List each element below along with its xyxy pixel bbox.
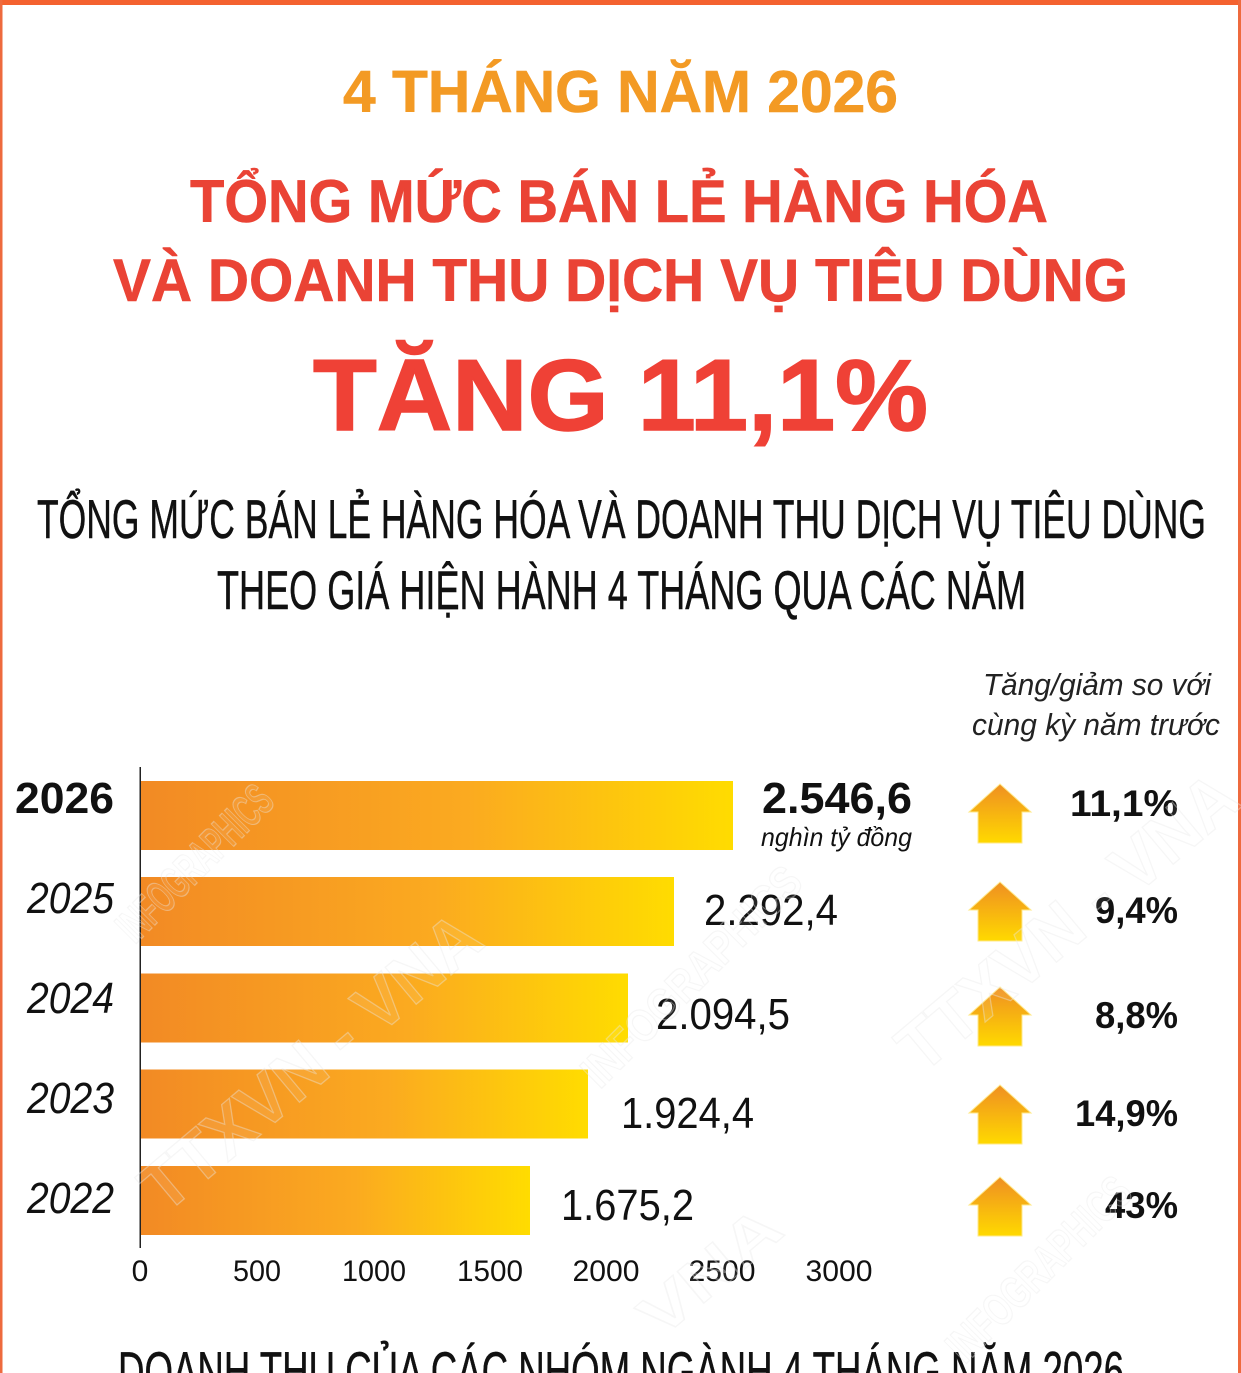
watermarks: VNA <box>625 1193 795 1350</box>
value labels: 2.292,4 <box>704 886 838 935</box>
column header: change vs same period: Tăng/giảm so với <box>983 667 1212 702</box>
watermarks: INFOGRAPHICS <box>570 855 812 1097</box>
value labels: 1.675,2 <box>561 1181 694 1230</box>
axis labels: 1000 <box>342 1255 406 1288</box>
watermarks: TTXVN - VNA <box>125 897 496 1226</box>
percentage labels: 9,4% <box>1095 890 1178 931</box>
axis labels <box>132 1255 872 1288</box>
watermarks: INFOGRAPHICS <box>935 1166 1142 1372</box>
percentage labels: 8,8% <box>1095 995 1178 1036</box>
title: main heading: TỔNG MỨC BÁN LẺ HÀNG HÓA <box>190 168 1048 235</box>
watermarks: INFOGRAPHICS <box>105 774 283 952</box>
axis labels: 1500 <box>457 1255 523 1288</box>
bar 2026 <box>141 781 733 850</box>
percentage labels: 43% <box>1105 1185 1178 1226</box>
chart axis <box>140 767 141 1248</box>
axis labels: 500 <box>233 1255 281 1288</box>
bar 2024 <box>141 974 628 1042</box>
title: main heading <box>113 168 1128 314</box>
title: period: 4 THÁNG NĂM 2026 <box>343 59 898 125</box>
axis labels: 0 <box>132 1255 148 1288</box>
value labels <box>561 774 913 1230</box>
value labels: nghìn tỷ đồng <box>761 822 913 852</box>
value labels: 1.924,4 <box>621 1089 754 1138</box>
percentage labels: 14,9% <box>1075 1093 1178 1134</box>
year labels: 2023 <box>26 1074 114 1123</box>
change column <box>969 783 1178 1236</box>
bar 2022 <box>141 1166 530 1235</box>
value labels: 2.546,6 <box>762 774 912 823</box>
percentage labels <box>1070 783 1178 1226</box>
year labels: 2026 <box>15 774 114 823</box>
column header: change vs same period <box>972 667 1220 742</box>
year labels: 2022 <box>26 1174 114 1223</box>
year labels: 2024 <box>26 974 114 1023</box>
percentage labels: 11,1% <box>1070 783 1178 824</box>
watermarks <box>105 757 1241 1372</box>
title: main heading: VÀ DOANH THU DỊCH VỤ TIÊU DÙNG <box>113 247 1128 314</box>
bar 2025 <box>141 877 674 946</box>
chart title <box>37 488 1206 621</box>
bar 2023 <box>141 1070 588 1138</box>
headline figure: TĂNG 11,1% <box>313 340 928 452</box>
column header: change vs same period: cùng kỳ năm trước <box>972 707 1220 742</box>
bar chart <box>15 767 913 1288</box>
axis labels: 2000 <box>572 1255 640 1288</box>
axis labels: 3000 <box>806 1255 872 1288</box>
year labels <box>15 774 114 1223</box>
value labels: 2.094,5 <box>656 990 790 1039</box>
axis labels: 2500 <box>688 1255 756 1288</box>
icon: up arrows <box>969 784 1031 1236</box>
year labels: 2025 <box>26 874 114 923</box>
